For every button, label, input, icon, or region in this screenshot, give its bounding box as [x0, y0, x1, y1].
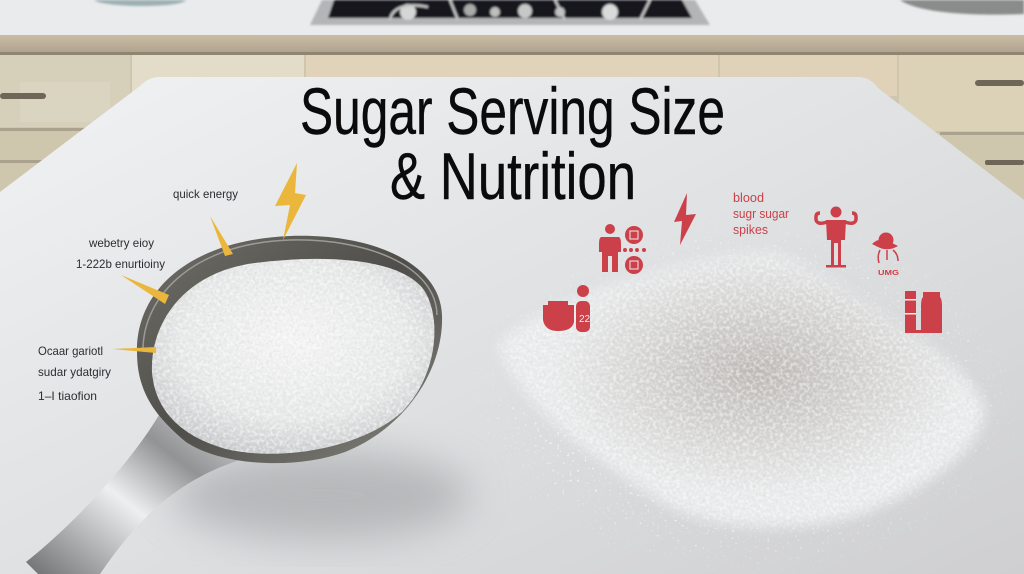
pointer: serving [121, 275, 169, 304]
title: & Nutrition [390, 139, 636, 213]
pile of sugar [497, 230, 1001, 564]
icon: head with drips: UMG [878, 270, 900, 277]
label: blood sugar spikes: blood [733, 191, 764, 205]
sugar in cup [152, 259, 434, 454]
label: blood sugar spikes: sugr sugar [733, 207, 789, 221]
label: blood sugar spikes [733, 191, 789, 237]
measuring cup [26, 236, 445, 574]
left callouts: serving size benefits [38, 163, 306, 403]
scattered grains [497, 230, 1001, 564]
icon: flexing figure [816, 206, 856, 268]
label: sugar category lines: sudar ydatgiry [38, 365, 111, 379]
label: sugar category lines: 1–I tiaofion [38, 389, 97, 403]
label: blood sugar spikes: spikes [733, 223, 768, 237]
label: quick energy: quick energy [173, 187, 238, 201]
label: sugar category lines: Ocaar gariotl [38, 344, 103, 358]
icon: yellow lightning bolt [275, 163, 306, 240]
right callouts: nutrition effects [543, 191, 942, 333]
label: serving lines: 1-222b enurtioiny [76, 257, 165, 271]
icon: containers [905, 291, 942, 333]
pointer: quick energy [210, 216, 233, 256]
icon: head with drips [872, 232, 900, 277]
handle [26, 408, 240, 574]
stove cooktop [310, 0, 710, 25]
title [300, 74, 725, 213]
label: serving lines [76, 236, 165, 271]
pointer: sugar category [112, 347, 156, 353]
icon: bowl and figure [543, 285, 591, 332]
bowl [137, 236, 442, 463]
cup shadow [170, 450, 470, 540]
countertop items [94, 0, 1024, 15]
icon: red lightning bolt [674, 193, 696, 245]
label: sugar category lines [38, 344, 111, 403]
icon: person with badges [599, 224, 646, 274]
icon: bowl and figure: 22 [579, 314, 591, 325]
title: Sugar Serving Size [300, 74, 725, 148]
label: serving lines: webetry eioy [88, 236, 154, 250]
